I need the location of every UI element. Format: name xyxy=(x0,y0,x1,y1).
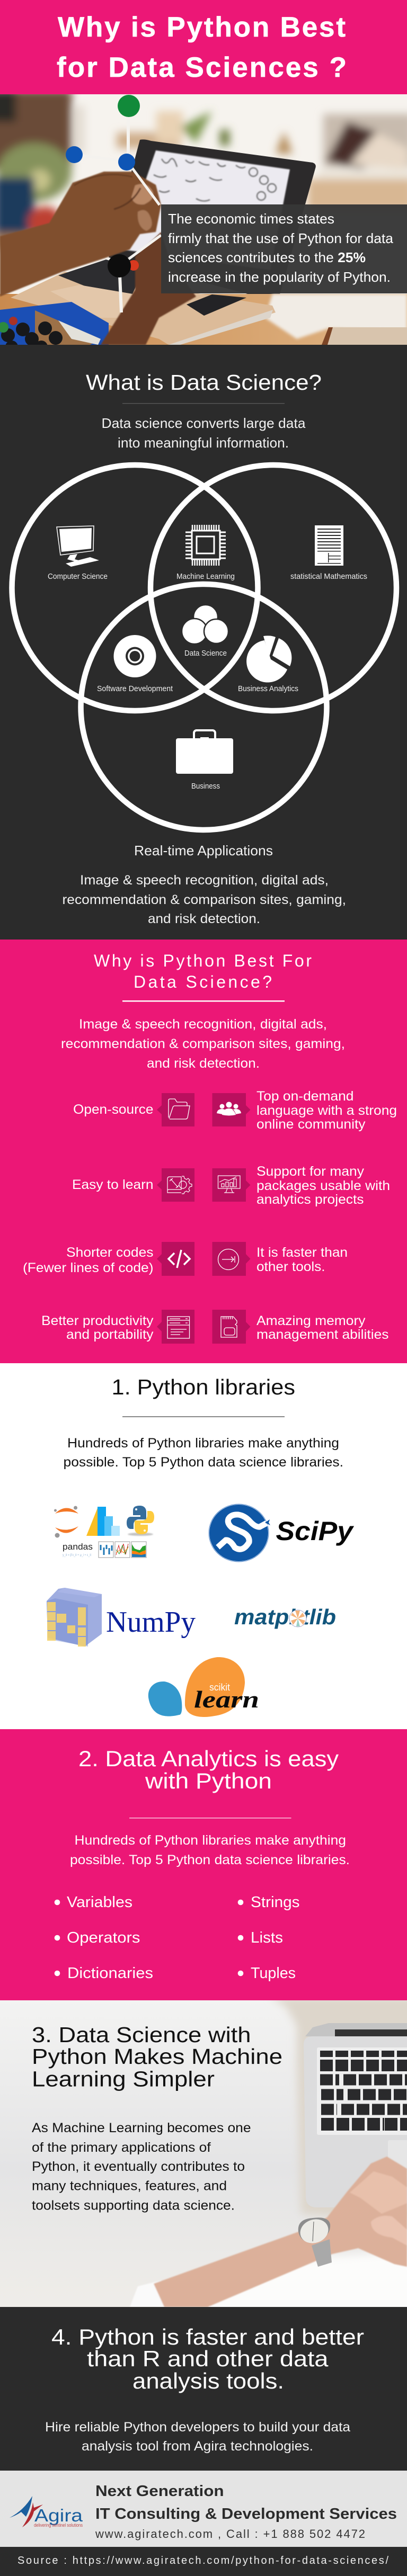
text: easy to learn: Easy to learn xyxy=(72,1177,154,1192)
subheading: real-time applications: Real-time Applications xyxy=(134,843,273,858)
icon: memory card xyxy=(212,1310,250,1344)
heading: data science with python: Python Makes Machine xyxy=(32,2044,282,2069)
text: next generation: Next Generation xyxy=(95,2483,224,2500)
list: python topics xyxy=(55,1894,299,1982)
list: python topics: Operators xyxy=(67,1929,140,1946)
book xyxy=(322,327,407,345)
text: community: Top on-demand xyxy=(256,1089,354,1104)
list: python topics: Variables xyxy=(67,1894,132,1911)
text: memory: management abilities xyxy=(256,1327,389,1342)
text: why python intro xyxy=(61,1017,345,1071)
text: faster: It is faster than xyxy=(256,1245,348,1260)
label: statistical mathematics: statistical Mathematics xyxy=(290,573,367,581)
icon: computer xyxy=(57,526,99,567)
laptop base and table xyxy=(0,260,407,347)
logo: jupyter, altair, python, pandas xyxy=(54,1506,154,1558)
text: libraries intro: Hundreds of Python libraries make anything xyxy=(67,1436,339,1451)
text: productivity: Better productivity xyxy=(41,1313,154,1328)
panel: company footer xyxy=(0,2471,407,2547)
wristwatch xyxy=(297,2215,332,2267)
text: memory xyxy=(256,1313,389,1342)
text: machine learning description: many techniques, features, and xyxy=(32,2179,227,2194)
icon: manual and gear xyxy=(157,1168,194,1202)
text: packages: analytics projects xyxy=(256,1192,364,1207)
laptop xyxy=(304,2023,407,2207)
label: business: Business xyxy=(191,782,220,791)
text: community xyxy=(256,1089,397,1132)
list: python topics: Dictionaries xyxy=(67,1965,153,1982)
logo: agira: delivering sentinel solutions xyxy=(34,2523,83,2528)
text: real-time applications description: and risk detection. xyxy=(148,911,260,926)
text: why python intro: and risk detection. xyxy=(147,1056,260,1071)
chart tiles xyxy=(99,1542,146,1558)
text: packages xyxy=(256,1164,390,1207)
heading: python libraries: 1. Python libraries xyxy=(111,1375,295,1399)
text: it consulting: IT Consulting & Development Services xyxy=(95,2506,397,2523)
heading: python is faster: analysis tools. xyxy=(132,2368,284,2393)
molecule model xyxy=(66,95,161,312)
text: source url: Source : https://www.agiratech.com/python-for-data-sciences/ xyxy=(17,2555,388,2566)
icon: target disc xyxy=(113,635,156,677)
label: computer science: Computer Science xyxy=(48,573,108,581)
heading: data science with python xyxy=(32,2023,282,2091)
text: faster xyxy=(256,1245,348,1274)
label: software development: Software Development xyxy=(97,685,173,693)
heading: data analytics: with Python xyxy=(145,1768,272,1793)
text: real-time applications description xyxy=(63,873,346,926)
icon: folder xyxy=(157,1093,194,1126)
text: hire developers: analysis tool from Agira technologies. xyxy=(82,2439,313,2454)
heading: python is faster: 4. Python is faster and better xyxy=(51,2324,364,2349)
laptop screen xyxy=(109,139,316,302)
text: shorter codes: (Fewer lines of code) xyxy=(23,1260,154,1275)
logo: agira: Agira xyxy=(34,2506,83,2525)
text: machine learning description: toolsets supporting data science. xyxy=(32,2198,235,2213)
heading: why python: Why is Python Best For xyxy=(94,951,312,970)
text: community: online community xyxy=(256,1117,366,1132)
text: shorter codes: Shorter codes xyxy=(66,1245,154,1260)
venn diagram xyxy=(12,465,396,830)
text: packages: Support for many xyxy=(256,1164,365,1179)
icon: arrow in circle xyxy=(212,1242,250,1276)
row: open-source and community xyxy=(73,1089,397,1132)
logo: jupyter xyxy=(54,1506,78,1538)
list: python topics: Tuples xyxy=(251,1965,296,1982)
text: hire developers xyxy=(45,2420,350,2454)
icon: data science circles xyxy=(182,605,228,644)
text: community: language with a strong xyxy=(256,1103,397,1118)
text: machine learning description: Python, it eventually contributes to xyxy=(32,2159,245,2174)
text: libraries intro xyxy=(64,1436,343,1470)
logo: python xyxy=(127,1506,154,1536)
icon: document list xyxy=(157,1310,194,1344)
logo: pandas text: pandas xyxy=(63,1542,93,1552)
icon: code brackets xyxy=(157,1242,194,1276)
heading: why python: Data Science? xyxy=(134,972,272,991)
panel: source bar xyxy=(0,2547,407,2576)
title xyxy=(57,12,347,83)
panel: what is data science xyxy=(0,345,407,940)
panel: title banner xyxy=(0,0,407,94)
text: real-time applications description: Image & speech recognition, digital ads, xyxy=(80,873,329,888)
text: productivity xyxy=(41,1313,154,1342)
text: machine learning description: of the primary applications of xyxy=(32,2140,211,2155)
text: contact details: www.agiratech.com , Call : +1 888 502 4472 xyxy=(95,2527,365,2541)
panel: python libraries xyxy=(0,1363,407,1729)
title: Why is Python Best xyxy=(58,12,346,43)
panel: machine learning photo xyxy=(0,1997,407,2314)
text: why python intro: recommendation & comparison sites, gaming, xyxy=(61,1036,345,1051)
heading: data science with python: Learning Simpler xyxy=(32,2067,215,2091)
heading: data science with python: 3. Data Science with xyxy=(32,2023,251,2047)
panel: data analytics xyxy=(0,1729,407,2000)
row: shorter codes and faster xyxy=(23,1242,348,1276)
text: shorter codes xyxy=(23,1245,154,1275)
icon: processor chip xyxy=(185,525,226,566)
title: for Data Sciences ? xyxy=(57,52,347,83)
panel: hero photo of molecule model and laptop xyxy=(0,90,407,353)
parts tray xyxy=(0,302,109,345)
logo: scikit-learn: learn xyxy=(194,1686,259,1713)
logo: scikit-learn: scikit xyxy=(209,1682,230,1693)
callout: economic times statistic xyxy=(161,204,407,293)
list: python topics: Strings xyxy=(251,1894,300,1911)
logo: scikit-learn xyxy=(148,1657,259,1717)
callout: economic times statistic: The economic times states xyxy=(168,211,334,227)
text: real-time applications description: recommendation & comparison sites, gaming, xyxy=(63,892,346,907)
hands xyxy=(0,172,196,345)
arm and hands xyxy=(130,2157,407,2307)
formula: y_it = β'x_it + μ_i + ε_it xyxy=(63,1554,91,1557)
callout: economic times statistic: sciences contributes to the 25% xyxy=(168,249,366,265)
logo: numpy: NumPy xyxy=(106,1606,196,1639)
text: hire developers: Hire reliable Python developers to build your data xyxy=(45,2420,350,2435)
heading: data analytics xyxy=(78,1746,339,1793)
icon: analytics monitor xyxy=(212,1168,250,1202)
text: faster: other tools. xyxy=(256,1259,325,1274)
text: machine learning description: As Machine Learning becomes one xyxy=(32,2121,251,2135)
logo: scipy xyxy=(209,1504,354,1562)
intro text xyxy=(102,415,306,451)
logo: numpy xyxy=(47,1588,196,1647)
text: data analytics intro: possible. Top 5 Python data science libraries. xyxy=(70,1853,350,1867)
text: data analytics intro xyxy=(70,1833,350,1867)
panel: python is faster xyxy=(0,2307,407,2471)
logo: altair xyxy=(86,1507,120,1536)
text: data analytics intro: Hundreds of Python libraries make anything xyxy=(74,1833,346,1848)
row: easy to learn and packages xyxy=(72,1164,390,1207)
heading: why python xyxy=(94,951,312,991)
heading: data analytics: 2. Data Analytics is easy xyxy=(78,1746,339,1771)
icon: statistics document xyxy=(315,525,343,566)
icon: community xyxy=(212,1093,250,1126)
icon: briefcase xyxy=(176,730,233,774)
heading: python is faster xyxy=(51,2324,364,2393)
callout: economic times statistic: increase in the popularity of Python. xyxy=(168,269,391,285)
intro text: into meaningful information. xyxy=(118,435,289,451)
heading: what is data science: What is Data Science? xyxy=(86,370,322,395)
heading: python is faster: than R and other data xyxy=(87,2346,329,2371)
text: productivity: and portability xyxy=(66,1327,154,1342)
text: packages: packages usable with xyxy=(256,1178,390,1193)
text: why python intro: Image & speech recognition, digital ads, xyxy=(79,1017,327,1032)
logo: agira xyxy=(10,2496,83,2528)
label: business analytics: Business Analytics xyxy=(238,685,298,693)
logo: matplotlib: matpl tlib xyxy=(234,1605,336,1629)
numpy cube xyxy=(47,1588,102,1647)
logo: scipy: SciPy xyxy=(276,1516,354,1546)
label: data science: Data Science xyxy=(184,649,227,658)
label: machine learning: Machine Learning xyxy=(176,573,235,581)
list: python topics: Lists xyxy=(251,1929,283,1946)
row: productivity and memory xyxy=(41,1310,389,1344)
text: libraries intro: possible. Top 5 Python data science libraries. xyxy=(64,1455,343,1470)
intro text: Data science converts large data xyxy=(102,415,306,431)
text: machine learning description xyxy=(32,2121,251,2213)
callout: economic times statistic: firmly that the use of Python for data xyxy=(168,230,394,246)
text: open-source: Open-source xyxy=(73,1102,154,1117)
text: memory: Amazing memory xyxy=(256,1313,366,1328)
icon: pie chart xyxy=(246,636,291,683)
panel: why python is best for data science xyxy=(0,940,407,1363)
